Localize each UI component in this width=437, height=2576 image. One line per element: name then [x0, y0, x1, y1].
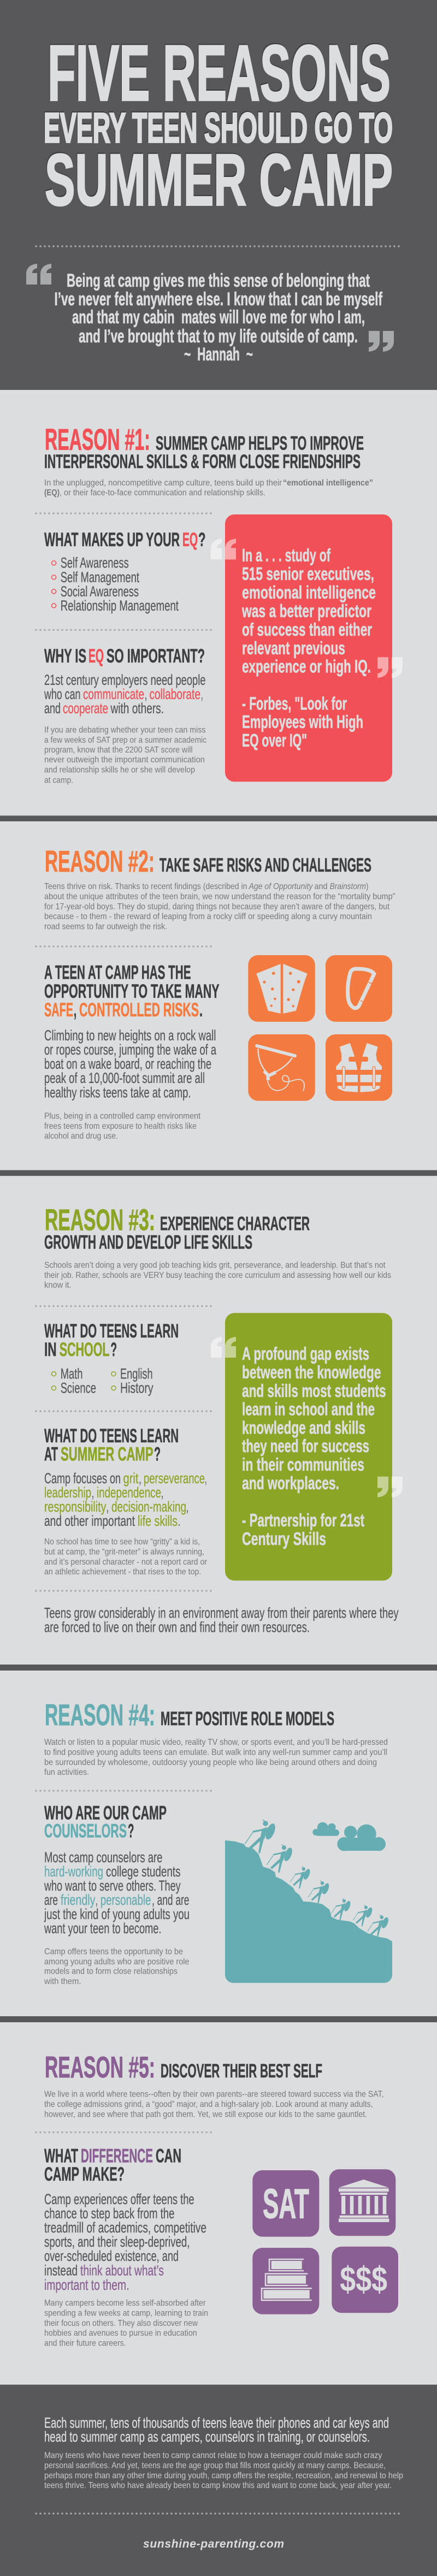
paragraph: life skills: grit: [123, 1470, 139, 1487]
intro text: reason 3: know it.: [44, 1281, 72, 1290]
paragraph: employers: ,: [201, 686, 203, 702]
heading: safe controlled risks: SAFE: [44, 999, 73, 1021]
icon: money: [332, 2247, 398, 2313]
paragraph: camp offers: with them.: [44, 1977, 81, 1986]
paragraph: many campers: Many campers become less self-absorbed after: [44, 2299, 206, 2308]
intro text: reason 3: their job. Rather, schools are VERY busy teaching the core curriculum and assessing how well our kids: [44, 1271, 391, 1280]
heading: safe controlled risks: OPPORTUNITY TO TAKE MANY: [44, 981, 220, 1002]
icon: college building: [329, 2169, 395, 2236]
heading: safe controlled risks: [44, 962, 220, 1021]
mountain slope: [225, 1840, 392, 1983]
paragraph: teens grow: are forced to live on their own and find their own resources.: [44, 1619, 310, 1636]
heading: reason 5: REASON #5:: [45, 2050, 155, 2084]
paragraph: climbing: peak of a 10,000-foot summit are all: [44, 1070, 205, 1086]
intro text: reason 2: ): [366, 882, 368, 891]
paragraph: climbing: Climbing to new heights on a rock wall: [44, 1027, 216, 1044]
intro text: reason 2: [44, 882, 395, 932]
quote from Hannah: ~ Hannah ~: [184, 344, 253, 365]
website URL: sunshine-parenting.com: [143, 2538, 284, 2550]
panel: footer: [0, 2385, 437, 2576]
paragraph: camp experiences: chance to step back from the: [44, 2205, 174, 2222]
intro text: reason 1: “emotional intelligence”: [283, 478, 373, 488]
paragraph: counselors: friendly: [61, 1892, 96, 1908]
paragraph: counselors: , and are: [152, 1892, 189, 1908]
heading: what difference: DIFFERENCE: [81, 2145, 153, 2166]
paragraph: climbing: boat on a wake board, or reaching the: [44, 1056, 211, 1072]
paragraph: employers: who can: [44, 686, 80, 702]
intro text: reason 2: road seems to far outweigh the risk.: [44, 922, 167, 932]
heading: reason 3: EXPERIENCE CHARACTER: [160, 1213, 310, 1235]
callout text: emotional intelligence: [242, 582, 376, 602]
paragraph: camp experiences: treadmill of academics, competitive: [44, 2219, 206, 2236]
heading: reason 3: [44, 1203, 310, 1253]
heading: learn in school: [44, 1320, 179, 1360]
callout: Partnership quote: [211, 1313, 403, 1580]
divider band: [0, 1665, 437, 1671]
intro text: reason 5: We live in a world where teens--often by their own parents--are steered toward success via the SAT,: [44, 2090, 384, 2099]
panel: reason 5: [36, 2050, 398, 2348]
heading: why is EQ so important: EQ: [88, 646, 104, 667]
panel: reason 2: [36, 844, 395, 1141]
paragraph: controlled environment: Plus, being in a controlled camp environment: [44, 1112, 200, 1121]
paragraph: life skills: ,: [161, 1484, 163, 1501]
heading: what makes up your EQ: ?: [198, 529, 205, 550]
paragraph: life skills: ,: [139, 1470, 141, 1487]
panel: header: [0, 0, 437, 390]
heading: reason 3: GROWTH AND DEVELOP LIFE SKILLS: [44, 1232, 252, 1253]
heading: camp counselors: [44, 1802, 167, 1842]
hikers: [245, 1820, 389, 1938]
heading: why is EQ so important: [44, 646, 205, 667]
paragraph: camp experiences: .: [127, 2277, 129, 2293]
intro text: reason 1: [44, 478, 373, 498]
paragraph: climbing: healthy risks teens take at camp.: [44, 1084, 191, 1100]
intro text: reason 2: Brainstorm: [330, 882, 366, 891]
icon: life vest: [326, 1034, 392, 1101]
icon: wakeboard handle: [248, 1034, 315, 1101]
heading: why is EQ so important: SO IMPORTANT?: [107, 646, 205, 667]
heading: reason 1: [44, 423, 364, 472]
icon: closing quote mark: [377, 1477, 403, 1497]
list: EQ components: Social Awareness: [61, 583, 139, 600]
list: EQ components: Self Management: [61, 569, 139, 585]
intro text: reason 1: In the unplugged, noncompetitive camp culture, teens build up their: [44, 478, 282, 488]
intro text: reason 4: [44, 1738, 388, 1777]
intro text: reason 2: because - to them - the reward of leaping from a rocky cliff or speeding along a curvy mountain: [44, 912, 372, 921]
closing paragraph: Many teens who have never been to camp cannot relate to how a teenager could make such crazy: [44, 2451, 382, 2460]
paragraph: grit meter: an athletic achievement - that rises to the top.: [44, 1567, 201, 1577]
intro text: reason 3: Schools aren’t doing a very good job teaching kids grit, perseverance, and leadership. But that’s not: [44, 1261, 386, 1270]
intro text: reason 2: Teens thrive on risk. Thanks to recent findings (described in: [44, 882, 247, 891]
paragraph: employers: [44, 672, 205, 716]
paragraph: SAT score: program, know that the 2200 SAT score will: [44, 745, 192, 755]
callout text: [241, 545, 376, 750]
paragraph: camp experiences: over-scheduled existence, and: [44, 2248, 179, 2264]
heading: learn in school: ?: [110, 1339, 117, 1360]
paragraph: teens grow: [44, 1605, 399, 1636]
heading: safe controlled risks: CONTROLLED RISKS: [79, 999, 199, 1021]
intro text: reason 1: , or their face-to-face communication and relationship skills.: [60, 488, 265, 498]
heading: reason 3: REASON #3:: [45, 1203, 155, 1237]
paragraph: camp experiences: [44, 2191, 206, 2293]
paragraph: grit meter: but at camp, the “grit-meter” is always running,: [44, 1548, 204, 1557]
paragraph: camp experiences: important to them: [44, 2277, 126, 2293]
paragraph: many campers: hobbies and avenues to pursue in education: [44, 2329, 197, 2338]
paragraph: life skills: ,: [107, 1499, 109, 1515]
panel: reason 3: ,: [205, 1470, 207, 1487]
heading: safe controlled risks: ,: [74, 999, 76, 1021]
closing paragraph: teens thrive. Teens who have already been to camp know this and want to come back, year after year.: [44, 2481, 392, 2490]
paragraph: employers: and: [44, 700, 61, 716]
paragraph: life skills: responsibility: [44, 1499, 107, 1515]
paragraph: grit meter: and it’s personal character - not a report card or: [44, 1558, 208, 1567]
paragraph: employers: ,: [145, 686, 147, 702]
paragraph: employers: with others.: [110, 700, 164, 716]
heading: camp counselors: ?: [128, 1821, 134, 1842]
divider band: [0, 1170, 437, 1176]
heading: what makes up your EQ: WHAT MAKES UP YOUR: [44, 529, 180, 550]
paragraph: SAT score: and relationship skills he or she will develop: [44, 766, 195, 775]
panel: reason 4: [36, 1698, 392, 1986]
panel: reason 3: [36, 1203, 403, 1636]
icon: opening quote mark: [26, 264, 51, 285]
paragraph: counselors: college students: [106, 1863, 181, 1880]
paragraph: SAT score: never outweigh the important communication: [44, 755, 205, 765]
callout text: they need for success: [242, 1436, 369, 1456]
list: school subjects: [51, 1365, 153, 1396]
paragraph: life skills: independence: [97, 1484, 161, 1501]
icon: stack of books: [252, 2248, 319, 2314]
heading: why is EQ so important: WHY IS: [44, 646, 86, 667]
paragraph: camp experiences: sports, and their sleep-deprived,: [44, 2234, 190, 2250]
intro text: reason 5: however, and see where that path got them. Yet, we still expose our kids to the same gauntlet.: [44, 2110, 367, 2119]
paragraph: counselors: want your teen to become.: [44, 1920, 161, 1937]
paragraph: counselors: hard-working: [44, 1863, 103, 1880]
callout text: Employees with High: [242, 712, 363, 732]
intro text: reason 4: to find positive young adults teens can emulate. But walk into any well-run summer camp and you’ll: [44, 1748, 387, 1757]
heading: camp counselors: WHO ARE OUR CAMP: [44, 1802, 167, 1823]
illustration: hikers on mountain: [225, 1820, 392, 1983]
icon: closing quote mark: [369, 331, 394, 352]
paragraph: many campers: spending a few weeks at camp, learning to train: [44, 2309, 208, 2318]
heading: learn in school: SCHOOL: [60, 1339, 109, 1360]
intro text: reason 4: fun activities.: [44, 1768, 89, 1777]
heading: what difference: CAMP MAKE?: [44, 2164, 125, 2185]
callout text: learn in school and the: [242, 1399, 375, 1419]
callout text: 515 senior executives,: [242, 564, 374, 584]
closing paragraph: [44, 2451, 403, 2490]
icon: opening quote mark: [211, 538, 236, 559]
callout text: relevant previous: [242, 638, 345, 658]
paragraph: counselors: ,: [96, 1892, 98, 1908]
heading: reason 1: REASON #1:: [45, 423, 150, 457]
heading: learn in school: WHAT DO TEENS LEARN: [44, 1320, 179, 1342]
heading: what difference: WHAT: [44, 2145, 78, 2166]
callout text: was a better predictor: [241, 601, 371, 621]
paragraph: SAT score: at camp.: [44, 775, 73, 785]
paragraph: life skills: decision-making: [111, 1499, 186, 1515]
paragraph: SAT score: a few weeks of SAT prep or a summer academic: [44, 736, 206, 745]
heading: reason 4: [45, 1698, 334, 1732]
paragraph: employers: cooperate: [63, 700, 108, 716]
heading: learn at summer camp: ?: [154, 1444, 161, 1465]
intro text: reason 2: about the unique attributes of the teen brain, we now understand the reason for the “mortality bump”: [44, 892, 395, 901]
divider band: [0, 816, 437, 821]
heading: what difference: [44, 2145, 181, 2185]
quote from Hannah: [55, 270, 382, 365]
panel: reason 1: [36, 423, 403, 785]
callout text: of success than either: [242, 619, 372, 639]
callout text: In a . . . study of: [242, 545, 331, 565]
paragraph: counselors: are: [44, 1892, 58, 1908]
divider band: [0, 2016, 437, 2022]
heading: learn at summer camp: AT: [44, 1444, 58, 1465]
list: school subjects: Math: [61, 1365, 83, 1382]
paragraph: life skills: .: [178, 1513, 180, 1529]
paragraph: camp offers: models and to form close relationships: [44, 1967, 178, 1976]
heading: what difference: CAN: [156, 2145, 181, 2166]
heading: learn at summer camp: SUMMER CAMP: [61, 1444, 153, 1465]
closing paragraph: personal sacrifices. And yet, teens are the age group that fills most quickly at many camps. Because,: [44, 2461, 386, 2470]
callout text: [242, 1343, 386, 1549]
heading: what makes up your EQ: EQ: [182, 529, 198, 550]
paragraph: life skills: leadership: [44, 1484, 91, 1501]
intro text: reason 5: the college admissions grind, a “good” major, and a high-salary job. Look around at many adults,: [44, 2100, 373, 2109]
icon: opening quote mark: [211, 1337, 236, 1358]
paragraph: SAT score: [44, 725, 206, 785]
heading: reason 2: [45, 844, 371, 878]
callout text: in their communities: [242, 1454, 364, 1474]
icon: closing quote mark: [377, 657, 403, 678]
intro text: reason 4: be surrounded by wholesome, outdoorsy young people who like being around others and doing: [44, 1758, 377, 1767]
paragraph: employers: communicate: [83, 686, 144, 702]
paragraph: counselors: who want to serve others. They: [44, 1878, 181, 1894]
callout text: EQ over IQ": [242, 730, 307, 750]
closing paragraph: perhaps more than any other time during youth, camp offers the respite, recreation, and renewal to help: [44, 2471, 403, 2480]
paragraph: life skills: ,: [92, 1484, 94, 1501]
paragraph: camp offers: [44, 1947, 189, 1986]
icon: SAT: [252, 2170, 319, 2237]
callout text: Century Skills: [242, 1529, 326, 1549]
list: school subjects: Science: [61, 1379, 96, 1396]
icon: carabiner: [326, 955, 392, 1022]
list: EQ components: Relationship Management: [61, 597, 179, 614]
callout text: A profound gap exists: [242, 1343, 369, 1364]
paragraph: camp experiences: instead: [44, 2262, 78, 2278]
heading: camp counselors: COUNSELORS: [44, 1821, 127, 1842]
title: [44, 29, 393, 221]
paragraph: life skills: [44, 1470, 207, 1529]
closing statement: [44, 2414, 389, 2445]
paragraph: climbing: [44, 1027, 217, 1100]
paragraph: climbing: or ropes course, jumping the wake of a: [44, 1041, 217, 1058]
heading: learn at summer camp: [44, 1425, 179, 1465]
intro text: reason 2: Age of Opportunity: [249, 882, 313, 891]
paragraph: controlled environment: alcohol and drug use.: [44, 1132, 118, 1141]
icon: SAT: SAT: [263, 2181, 309, 2228]
intro text: reason 2: and: [315, 882, 328, 891]
paragraph: employers: 21st century employers need people: [44, 672, 205, 688]
intro text: reason 4: Watch or listen to a popular music video, reality TV show, or sports event, and you’ll be hard-pressed: [44, 1738, 388, 1747]
paragraph: controlled environment: [44, 1112, 200, 1141]
list: school subjects: English: [120, 1365, 153, 1382]
paragraph: employers: collaborate: [150, 686, 200, 702]
paragraph: grit meter: [44, 1537, 208, 1577]
intro text: reason 3: [44, 1261, 391, 1290]
callout: Forbes quote: [211, 514, 403, 781]
paragraph: camp experiences: Camp experiences offer teens the: [44, 2191, 194, 2207]
paragraph: counselors: Most camp counselors are: [44, 1849, 162, 1866]
paragraph: controlled environment: frees teens from exposure to health risks like: [44, 1122, 197, 1131]
heading: reason 5: [45, 2050, 322, 2084]
intro text: reason 5: [44, 2090, 384, 2119]
callout text: and workplaces.: [242, 1473, 339, 1493]
paragraph: life skills: perseverance: [144, 1470, 205, 1487]
callout text: - Forbes, "Look for: [242, 694, 347, 713]
paragraph: grit meter: No school has time to see how “gritty” a kid is,: [44, 1537, 200, 1547]
paragraph: life skills: life skills: [138, 1513, 178, 1529]
callout text: - Partnership for 21st: [242, 1510, 364, 1530]
heading: reason 5: DISCOVER THEIR BEST SELF: [161, 2060, 322, 2082]
callout text: experience or high IQ.: [242, 656, 371, 677]
paragraph: counselors: personable: [101, 1892, 151, 1908]
paragraph: life skills: Camp focuses on: [44, 1470, 121, 1487]
icon: money: $$$: [340, 2259, 387, 2299]
paragraph: SAT score: If you are debating whether your teen can miss: [44, 725, 205, 735]
paragraph: many campers: [44, 2299, 208, 2348]
heading: safe controlled risks: .: [199, 999, 203, 1021]
intro text: reason 1: (EQ): [44, 488, 60, 498]
callout text: knowledge and skills: [242, 1418, 365, 1438]
paragraph: camp experiences: think about what’s: [80, 2262, 164, 2278]
paragraph: life skills: and other important: [44, 1513, 135, 1529]
paragraph: counselors: just the kind of young adults you: [44, 1906, 190, 1922]
list: school subjects: History: [120, 1379, 153, 1396]
icon: climbing wall: [248, 955, 315, 1022]
intro text: reason 2: for 17-year-old boys. They do stupid, daring things not because they aren’t aware of the dangers, but: [44, 902, 389, 911]
heading: reason 4: REASON #4:: [45, 1698, 155, 1732]
paragraph: many campers: their focus on others. They also discover new: [44, 2319, 198, 2328]
paragraph: life skills: ,: [186, 1499, 188, 1515]
heading: reason 2: REASON #2:: [45, 844, 155, 878]
paragraph: counselors: [44, 1849, 190, 1937]
list: EQ components: [51, 555, 179, 614]
paragraph: many campers: and their future careers.: [44, 2338, 126, 2348]
paragraph: camp offers: Camp offers teens the opportunity to be: [44, 1947, 183, 1957]
heading: learn in school: IN: [44, 1339, 57, 1360]
clouds: [312, 1822, 386, 1851]
list: EQ components: Self Awareness: [61, 555, 129, 571]
paragraph: camp offers: among young adults who are positive role: [44, 1957, 189, 1967]
heading: learn at summer camp: WHAT DO TEENS LEARN: [44, 1425, 179, 1447]
heading: safe controlled risks: A TEEN AT CAMP HAS THE: [44, 962, 191, 984]
